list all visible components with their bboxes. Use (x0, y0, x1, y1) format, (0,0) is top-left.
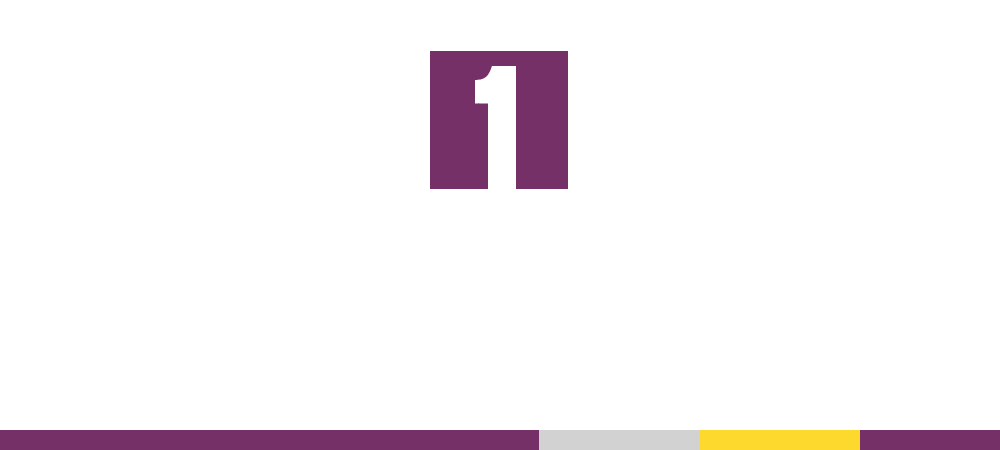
number tile (430, 51, 568, 189)
stripe segment: yellow (700, 430, 860, 450)
stripe segment: purple right (860, 430, 1000, 450)
stripe segment: grey (539, 430, 700, 450)
colour stripe footer (0, 430, 1000, 450)
stripe segment: purple left (0, 430, 539, 450)
